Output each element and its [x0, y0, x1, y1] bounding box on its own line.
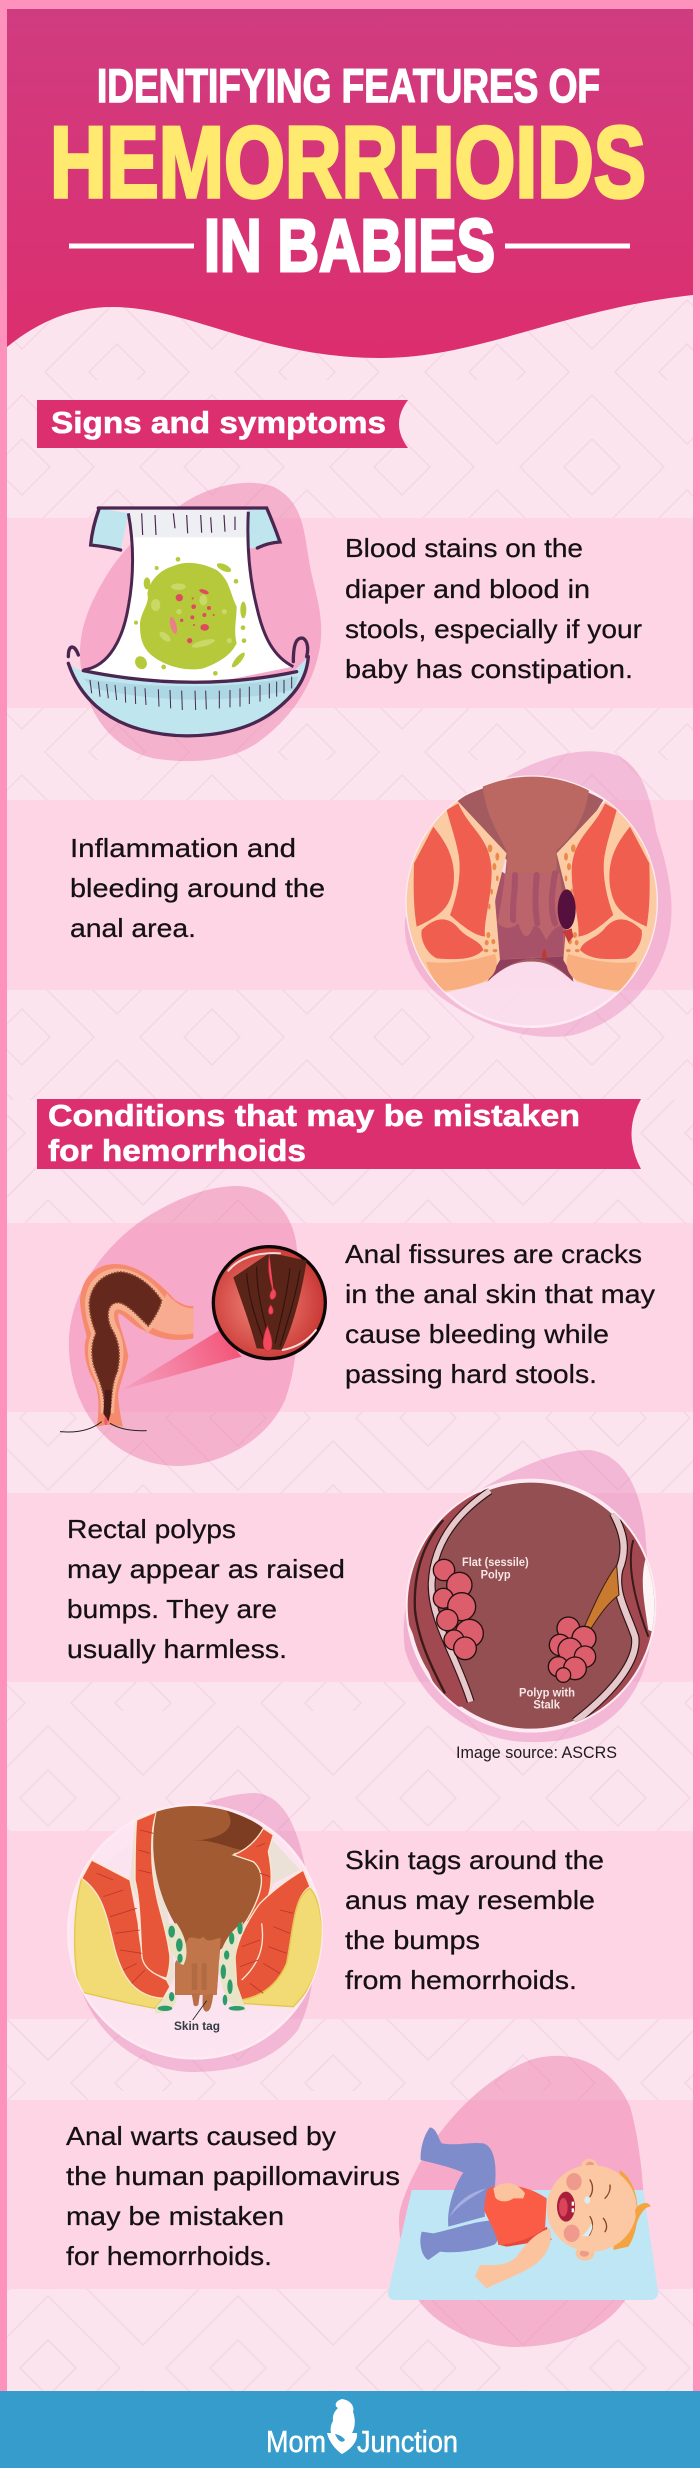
text: rectal polyps: Rectal polyps — [67, 1514, 236, 1544]
text: blood stains: baby has constipation. — [345, 654, 633, 684]
text: anal warts: may be mistaken — [66, 2201, 284, 2231]
baby illustration with backdrop — [388, 2056, 658, 2347]
text: anal fissures: cause bleeding while — [345, 1319, 609, 1349]
panel: anal warts — [7, 2056, 693, 2347]
heading: signs and symptoms — [37, 400, 408, 448]
text: inflammation: bleeding around the — [70, 873, 325, 903]
backdrop blob — [404, 1450, 652, 1742]
anatomy illustration with backdrop — [405, 751, 671, 1037]
panel: blood stains — [7, 483, 693, 761]
backdrop blob — [74, 1793, 314, 2072]
polyp illustration: Flat (sessile) — [462, 1555, 529, 1569]
text: inflammation — [70, 833, 325, 943]
text: rectal polyps: bumps. They are — [67, 1594, 277, 1624]
logo: MomJunction: Junction — [357, 2424, 458, 2459]
text: anal warts: Anal warts caused by — [66, 2121, 336, 2151]
header banner — [7, 9, 693, 358]
text: rectal polyps: may appear as raised — [67, 1554, 345, 1584]
text: anal fissures: passing hard stools. — [345, 1359, 597, 1389]
text: skin tags: Skin tags around the — [345, 1845, 604, 1875]
heading: conditions that may be mistaken: Conditions that may be mistaken — [48, 1098, 580, 1133]
text: blood stains: diaper and blood in — [345, 574, 590, 604]
colon and magnified fissure illustration — [60, 1247, 325, 1432]
title — [50, 59, 646, 287]
backdrop blob — [69, 1186, 299, 1466]
polyp illustration — [400, 1481, 667, 1737]
image source caption: Image source: ASCRS — [456, 1744, 617, 1762]
text: anal fissures: Anal fissures are cracks — [345, 1239, 642, 1269]
text: blood stains — [345, 533, 642, 684]
logo: MomJunction: Mom — [266, 2424, 326, 2459]
text: inflammation: Inflammation and — [70, 833, 296, 863]
panel: anal fissures — [7, 1186, 693, 1466]
text: anal warts: the human papillomavirus — [66, 2161, 400, 2191]
text: blood stains: stools, especially if your — [345, 614, 642, 644]
text: anal fissures — [345, 1239, 655, 1389]
text: skin tags: anus may resemble — [345, 1885, 595, 1915]
text: anal warts — [66, 2121, 400, 2271]
header wave background — [7, 9, 693, 358]
panel: skin tags — [7, 1793, 693, 2072]
footer — [0, 2391, 700, 2468]
logo: MomJunction — [266, 2399, 458, 2459]
text: anal warts: for hemorrhoids. — [66, 2241, 272, 2271]
polyp illustration: Polyp — [481, 1567, 511, 1581]
skin tag illustration — [68, 1805, 322, 2058]
text: rectal polyps — [67, 1514, 345, 1664]
text: skin tags: the bumps — [345, 1925, 480, 1955]
polyp illustration: Stalk — [533, 1697, 560, 1711]
heading: signs and symptoms: Signs and symptoms — [51, 405, 386, 440]
panel: inflammation — [7, 751, 693, 1037]
polyp illustration: Polyp with — [519, 1686, 575, 1700]
skin tag illustration: Skin tag — [174, 2019, 220, 2033]
text: inflammation: anal area. — [70, 913, 196, 943]
heading: conditions that may be mistaken: for hemorrhoids — [48, 1133, 306, 1168]
text: skin tags: from hemorrhoids. — [345, 1965, 577, 1995]
diaper illustration with backdrop — [68, 483, 321, 761]
heading: conditions that may be mistaken — [37, 1098, 641, 1169]
text: skin tags — [345, 1845, 604, 1995]
panel: rectal polyps — [7, 1450, 693, 1762]
text: rectal polyps: usually harmless. — [67, 1634, 287, 1664]
text: anal fissures: in the anal skin that may — [345, 1279, 655, 1309]
title: IN BABIES — [204, 204, 495, 287]
text: blood stains: Blood stains on the — [345, 533, 583, 563]
